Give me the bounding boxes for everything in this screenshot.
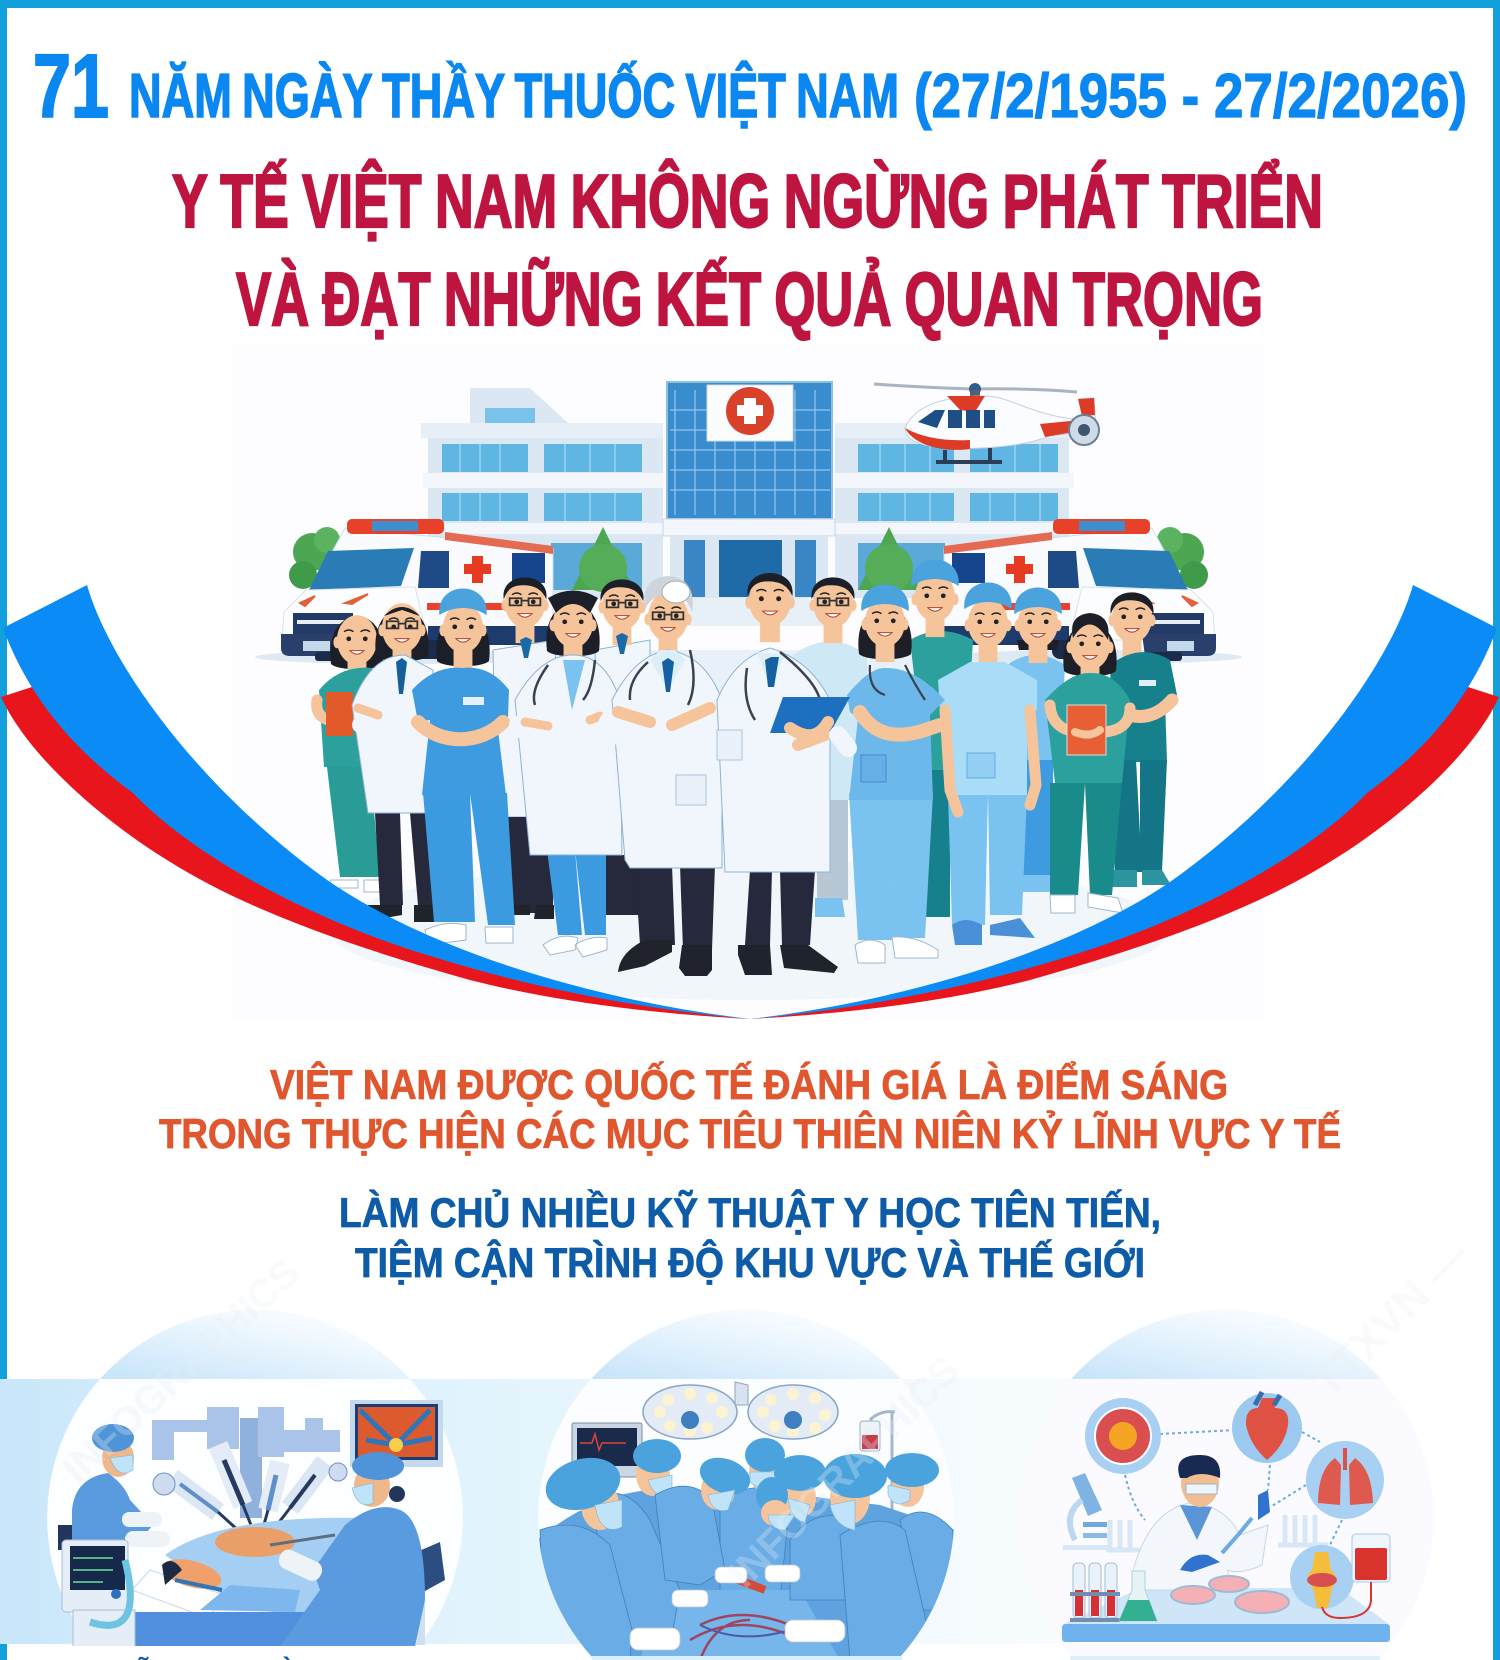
teal male nurse: [1108, 592, 1177, 887]
orange statement: TRONG THỰC HIỆN CÁC MỤC TIÊU THIÊN NIÊN KỶ LĨNH VỰC Y TẾ: [159, 1109, 1341, 1157]
patient monitor: [62, 1540, 135, 1648]
red ribbon right: [750, 687, 1499, 1019]
blood bag: [1322, 1534, 1390, 1618]
circle backgrounds: [47, 1379, 908, 1637]
watermark: [54, 1231, 1479, 1596]
title: main heading: [172, 159, 1323, 341]
endoscopy screen: [350, 1400, 443, 1467]
hospital building: [421, 382, 1075, 626]
title: anniversary line: NĂM NGÀY THẦY THUỐC VIỆT NAM: [129, 62, 899, 131]
nurse in blue: [412, 589, 515, 945]
back surgeons: [720, 1438, 953, 1610]
front surgeons left: [540, 1439, 755, 1660]
blue statement: LÀM CHỦ NHIỀU KỸ THUẬT Y HỌC TIÊN TIẾN,: [339, 1188, 1161, 1236]
red ribbon left: [1, 687, 750, 1019]
circle caps: [100, 1310, 1381, 1379]
microscope: [1063, 1473, 1108, 1550]
teal nurse front right with book: [1045, 613, 1130, 913]
robot tower: [152, 1407, 347, 1534]
strips under circles: [592, 1656, 1380, 1660]
teal nurse back: [910, 560, 973, 917]
petri dishes: [1171, 1576, 1289, 1613]
watermark: INFOGRAPHICS: [720, 1348, 968, 1596]
right surgeon: [270, 1452, 445, 1646]
lower section band: [0, 1379, 1493, 1644]
heart monitor: [572, 1423, 642, 1477]
heart icon: [1232, 1392, 1302, 1463]
IV stand: [860, 1412, 895, 1515]
ambulance left: [255, 519, 555, 664]
blue ribbon right: [750, 585, 1497, 1019]
illustration: regenerative medicine lab: [1062, 1392, 1390, 1642]
trees: [572, 527, 920, 592]
patient and blanket: [132, 1518, 362, 1650]
illustration: open surgery team: [537, 1382, 955, 1660]
lungs icon: [1306, 1441, 1384, 1519]
front surgeons right: [756, 1454, 935, 1660]
orange statement: VIỆT NAM ĐƯỢC QUỐC TẾ ĐÁNH GIÁ LÀ ĐIỂM SÁNG: [270, 1060, 1228, 1108]
orange statement: [159, 1060, 1341, 1157]
doctor back centre: [595, 579, 650, 915]
senior doctor: [610, 576, 722, 976]
lab table: [1062, 1588, 1390, 1642]
watermark: INFOGRAPHICS: [54, 1250, 308, 1492]
illustration: robotic surgery: [58, 1400, 445, 1650]
centre table with tubes: [641, 1578, 838, 1656]
blue statement: [339, 1188, 1161, 1286]
test rack background: [1106, 1515, 1328, 1550]
doctor back left: [493, 577, 560, 919]
blue statement: TIỆM CẬN TRÌNH ĐỘ KHU VỰC VÀ THẾ GIỚI: [355, 1238, 1145, 1286]
connector lines: [1125, 1430, 1342, 1545]
scientist: [1133, 1455, 1270, 1590]
test tubes: [1070, 1563, 1120, 1622]
light blue nurse back: [1007, 588, 1065, 892]
blue ribbon left: [3, 585, 750, 1019]
female doctor centre left: [515, 590, 622, 957]
hero illustration panel: [233, 345, 1265, 1020]
title: anniversary line: [33, 37, 1467, 137]
flask: [1119, 1571, 1157, 1621]
doctor back right in light blue: [793, 577, 867, 917]
medical team: [317, 560, 1177, 976]
lead doctor with clipboard: [717, 573, 850, 975]
nurse with stethoscope: [847, 585, 945, 963]
left surgeon: [58, 1424, 170, 1550]
cell icon: [1085, 1398, 1161, 1474]
watermark: TTXVN —: [1302, 1231, 1479, 1407]
teal nurse with folder: [317, 615, 384, 892]
gown mass: [537, 1490, 955, 1660]
female doctor with glasses: [352, 603, 438, 922]
helicopter: [874, 383, 1099, 462]
hospital sign: [707, 385, 793, 441]
ambulance right: [942, 519, 1242, 664]
flask liquid: [1119, 1600, 1157, 1621]
light blue uniform man: [938, 583, 1037, 945]
knee joint icon: [1290, 1545, 1354, 1609]
surgical lights: [643, 1382, 838, 1439]
title: anniversary line: 71: [33, 37, 109, 137]
